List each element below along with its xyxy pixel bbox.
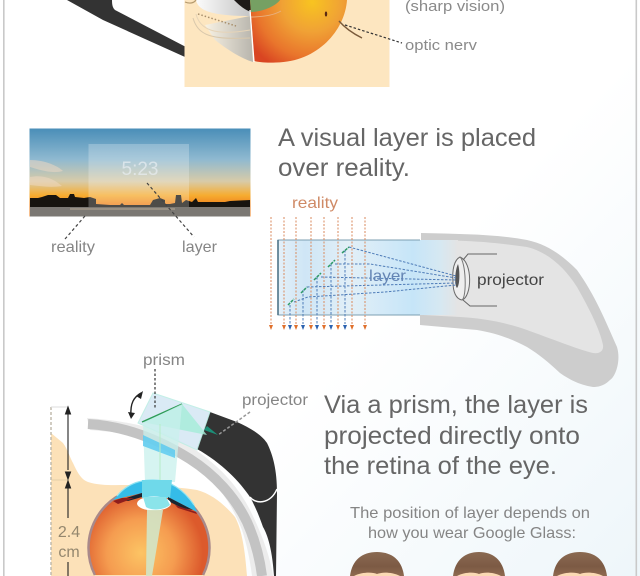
translucent layer bbox=[88, 144, 189, 207]
lens bbox=[453, 254, 497, 306]
heading: visual layer: over reality. bbox=[278, 154, 410, 182]
label: optic nerv: optic nerv bbox=[405, 37, 478, 54]
heading: via a prism: projected directly onto bbox=[324, 422, 580, 450]
eye globe bbox=[88, 487, 210, 575]
measure arrows bbox=[66, 407, 70, 576]
reality rays bbox=[271, 217, 365, 325]
photo: sunset skyline with layer bbox=[30, 128, 250, 239]
skyline bbox=[30, 194, 250, 208]
label: layer: layer bbox=[182, 239, 218, 256]
heading: via a prism: Via a prism, the layer is bbox=[324, 391, 588, 419]
icon: head middle bbox=[453, 552, 505, 576]
text: wearing position: how you wear Google Glass: bbox=[368, 525, 576, 542]
icon: head left bbox=[350, 552, 404, 576]
eyeball orange bbox=[250, 0, 347, 63]
heading: via a prism: the retina of the eye. bbox=[324, 452, 557, 480]
frame bbox=[197, 412, 277, 576]
label: projector: projector bbox=[477, 272, 545, 289]
heading: visual layer bbox=[278, 124, 536, 182]
prism bbox=[138, 393, 210, 450]
label: reality: reality bbox=[292, 195, 338, 212]
light beam bbox=[143, 404, 182, 482]
diagram: prism and eye cross-section bbox=[51, 369, 277, 576]
label: prism: prism bbox=[143, 352, 185, 369]
label: 2.4 cm bbox=[58, 524, 80, 561]
retina beam bbox=[146, 510, 163, 576]
skin profile bbox=[51, 433, 247, 576]
glass lens band bbox=[87, 418, 273, 576]
text: wearing position bbox=[350, 505, 590, 542]
cornea bbox=[113, 480, 197, 512]
tilt arrow bbox=[131, 393, 141, 416]
leaders bbox=[65, 216, 85, 239]
label: 2.4 cm: cm bbox=[58, 544, 80, 561]
optic nerve leader bbox=[345, 25, 402, 43]
diagram: projector optics bbox=[269, 217, 618, 387]
waveguide bbox=[278, 240, 458, 315]
label: projector: projector bbox=[242, 392, 308, 409]
label: 2.4 cm: 2.4 bbox=[58, 524, 80, 541]
label: layer: layer bbox=[369, 268, 407, 285]
reflectors and rays bbox=[290, 247, 456, 324]
optic nerve bbox=[339, 21, 362, 38]
glasses arm bbox=[67, 0, 185, 57]
clock text: 5:23 bbox=[122, 159, 158, 180]
iris bbox=[120, 493, 142, 501]
height dashed rule bbox=[50, 407, 52, 576]
text: wearing position: The position of layer depends on bbox=[350, 505, 590, 522]
label: reality: reality bbox=[51, 239, 95, 256]
icon: head right bbox=[553, 552, 607, 576]
panel: top eye diagram bbox=[67, 0, 505, 87]
heading: via a prism bbox=[324, 391, 588, 480]
lens bbox=[137, 496, 171, 510]
sclera section bbox=[205, 16, 253, 62]
skin block bbox=[184, 0, 390, 87]
projector housing bbox=[420, 233, 618, 387]
heading: visual layer: A visual layer is placed bbox=[278, 124, 536, 152]
label leaders bbox=[154, 369, 156, 408]
